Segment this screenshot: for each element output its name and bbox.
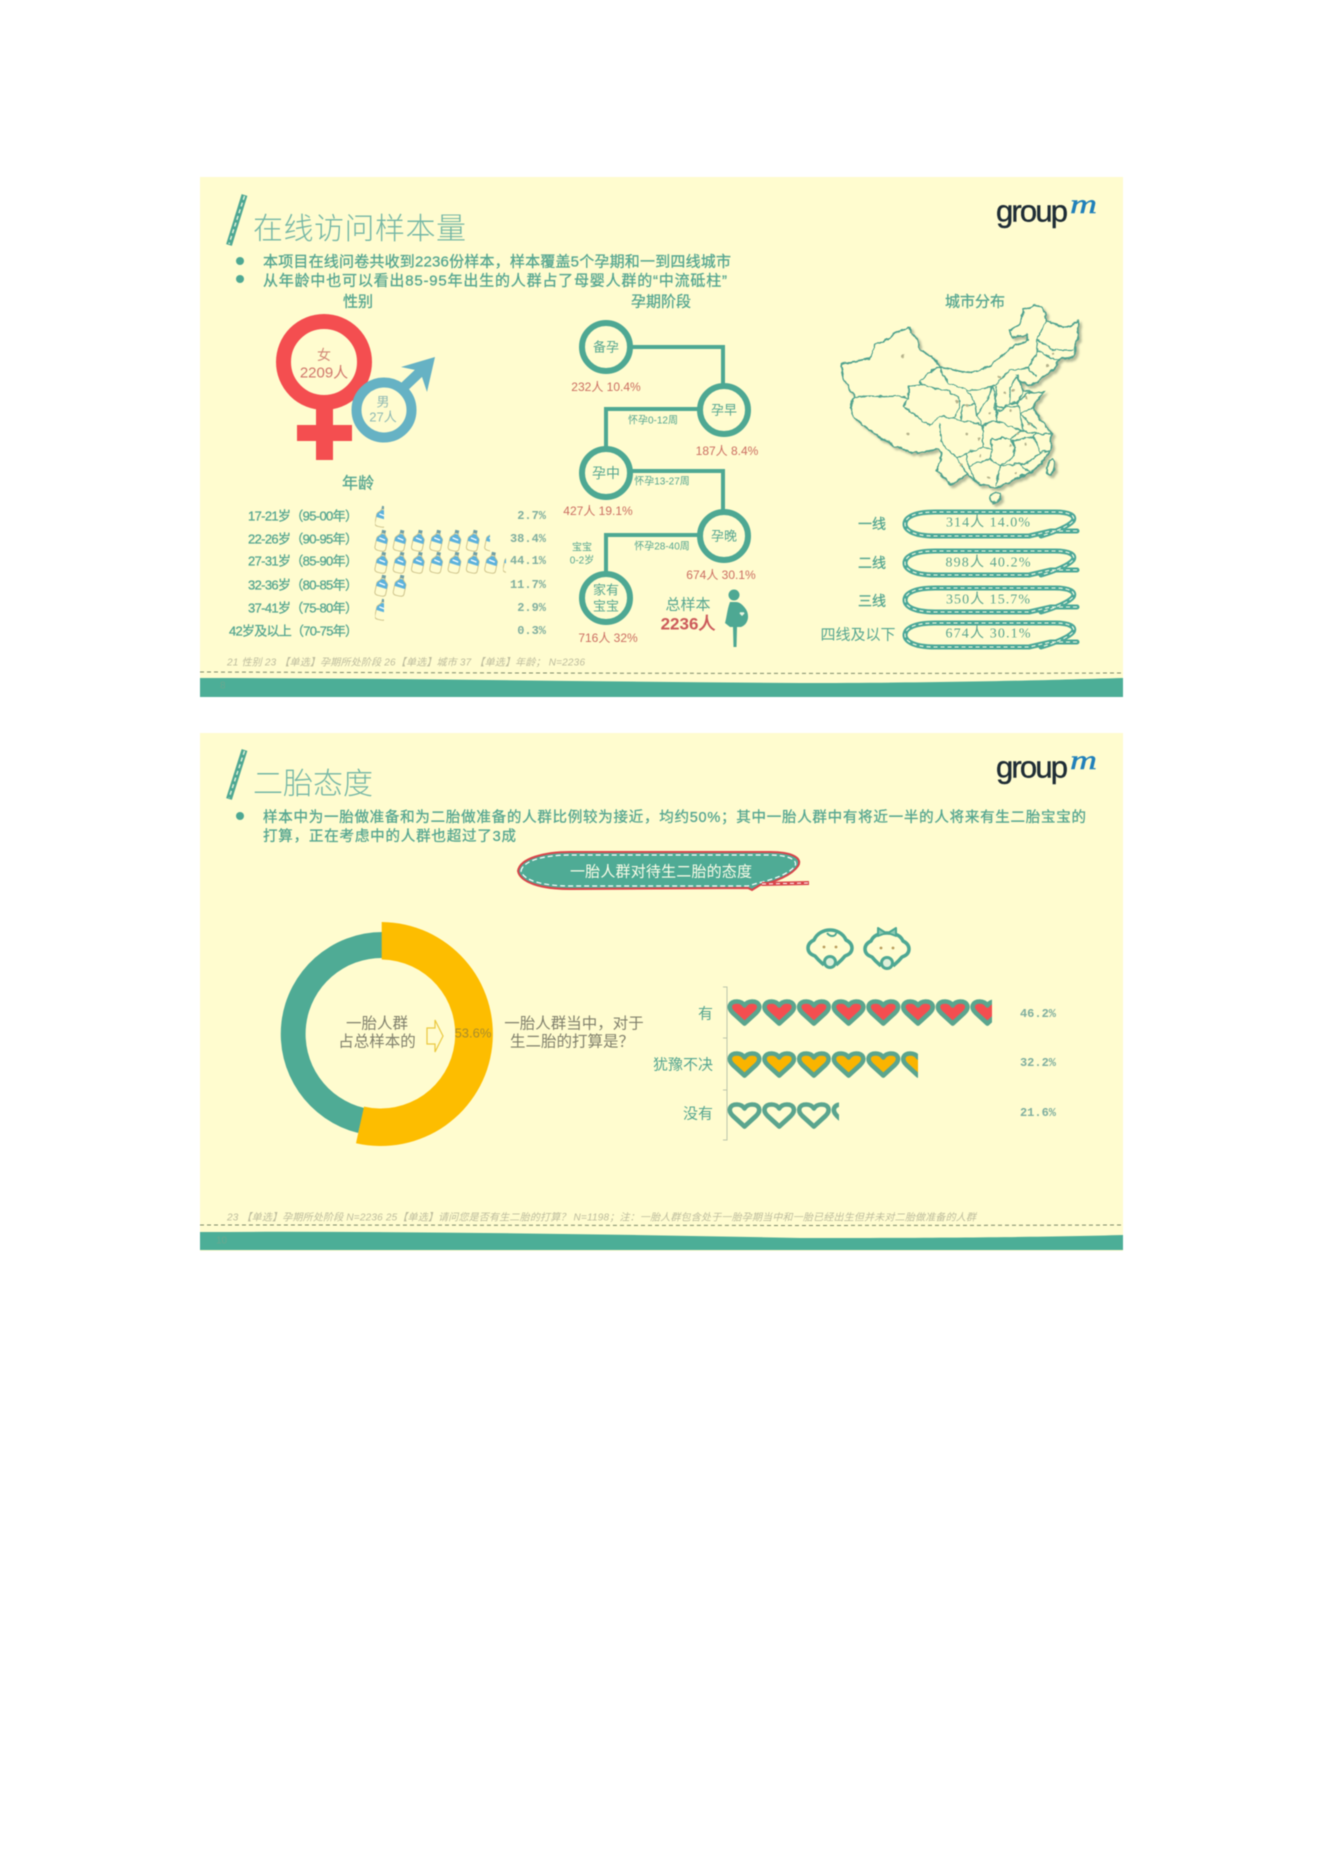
row 17-21: 2.7% bbox=[517, 509, 547, 523]
title icon: stitched slash bbox=[229, 195, 244, 245]
heading: city distribution: 城市分布 bbox=[945, 294, 1005, 310]
bullet point: 样本中为一胎做准备和为二胎做准备的人群比例较为接近，均约50%；其中一胎人群中有将近一半的人将来有生二胎宝宝的 bbox=[263, 808, 1086, 826]
row 27-31: 44.1% bbox=[510, 554, 547, 568]
stage duration labels: 怀孕13-27周 bbox=[634, 476, 690, 488]
row: no: 没有 bbox=[683, 1106, 713, 1122]
stage: 孕晚: 674人 30.1% bbox=[686, 568, 756, 582]
footer strip bbox=[200, 672, 1123, 697]
row 22-26: 38.4% bbox=[510, 532, 547, 546]
footer strip: 10 bbox=[216, 1236, 228, 1246]
tier 4: 四线及以下 bbox=[820, 626, 896, 644]
footer strip: 8 bbox=[220, 680, 226, 692]
tier 2 bbox=[858, 551, 1077, 575]
donut centre text: 占总样本的 bbox=[338, 1032, 416, 1050]
row: yes bbox=[698, 1002, 1057, 1024]
stage: 孕中 bbox=[563, 449, 633, 518]
heading: age: 年龄 bbox=[342, 474, 374, 492]
total sample callout bbox=[661, 596, 716, 634]
bullet points bbox=[236, 254, 731, 290]
stage: 孕中: 孕中 bbox=[592, 465, 620, 481]
panel: online sample size bbox=[200, 177, 1123, 697]
row: undecided bbox=[653, 1054, 1057, 1076]
chart: heart pictogram bbox=[653, 987, 1057, 1140]
logo: groupm: m bbox=[1070, 189, 1097, 219]
stage duration labels: 宝宝 bbox=[572, 540, 592, 554]
bullet points: 本项目在线问卷共收到2236份样本，样本覆盖5个孕期和一到四线城市 bbox=[263, 254, 731, 270]
icon: pregnant woman bbox=[725, 590, 748, 647]
stage: 孕晚 bbox=[686, 512, 756, 582]
row 32-36 bbox=[248, 574, 547, 597]
stage duration labels: 怀孕0-12周 bbox=[628, 414, 678, 426]
row: no bbox=[683, 1104, 1057, 1126]
heading: pregnancy stage: 孕期阶段 bbox=[631, 294, 691, 310]
title icon: stitched slash bbox=[229, 750, 244, 799]
row 42+ bbox=[229, 624, 547, 638]
stage duration labels bbox=[570, 414, 690, 566]
chart: city tiers bbox=[820, 512, 1077, 647]
row 42+: 42岁及以上（70-75年） bbox=[229, 624, 358, 638]
bullet point: 打算，正在考虑中的人群也超过了3成 bbox=[263, 828, 516, 845]
question text bbox=[504, 1014, 644, 1050]
tier 1: 314人 14.0% bbox=[946, 514, 1030, 530]
title: 二胎态度 bbox=[253, 759, 373, 803]
row 32-36: 11.7% bbox=[510, 578, 547, 592]
row 17-21: 17-21岁（95-00年） bbox=[248, 508, 358, 524]
icon: female symbol with count: 女 bbox=[317, 347, 331, 363]
tier 2: 898人 40.2% bbox=[946, 554, 1031, 570]
tier 3 bbox=[858, 588, 1077, 612]
icon: female symbol with count: 2209人 bbox=[300, 364, 348, 382]
icon: male symbol with count: 27人 bbox=[369, 410, 397, 424]
title: 在线访问样本量 bbox=[253, 204, 466, 248]
row: undecided: 犹豫不决 bbox=[653, 1056, 713, 1074]
icon: baby girl bbox=[865, 928, 909, 968]
stage: 备孕: 备孕 bbox=[593, 340, 619, 354]
row 27-31: 27-31岁（85-90年） bbox=[248, 554, 358, 568]
logo: groupm: group bbox=[996, 750, 1068, 784]
question text: 生二胎的打算是？ bbox=[510, 1032, 634, 1050]
row: yes: 46.2% bbox=[1020, 1007, 1057, 1021]
tier 4 bbox=[820, 623, 1077, 647]
icon: baby boy bbox=[808, 930, 852, 968]
tier 1 bbox=[858, 512, 1077, 536]
stage: 家有宝宝: 家有 bbox=[593, 582, 619, 598]
stage: 孕早: 孕早 bbox=[711, 402, 737, 418]
question text: 一胎人群当中，对于 bbox=[504, 1014, 644, 1032]
stage: 孕晚: 孕晚 bbox=[711, 528, 737, 544]
bullet point bbox=[236, 808, 1086, 845]
total sample callout: 2236人 bbox=[661, 614, 716, 634]
row 22-26: 22-26岁（90-95年） bbox=[248, 532, 358, 546]
logo: groupm: group bbox=[996, 194, 1068, 228]
stage: 孕早 bbox=[696, 386, 759, 458]
row 37-41 bbox=[248, 598, 547, 621]
bullet points: 从年龄中也可以看出85-95年出生的人群占了母婴人群的“中流砥柱” bbox=[263, 272, 727, 290]
heading: gender: 性别 bbox=[343, 294, 373, 310]
stage duration labels: 怀孕28-40周 bbox=[634, 540, 690, 552]
stage: 备孕 bbox=[571, 323, 641, 394]
arrow: hollow yellow bbox=[427, 1020, 443, 1052]
tier 3: 三线 bbox=[858, 593, 886, 609]
logo: groupm: m bbox=[1070, 745, 1097, 775]
tier 2: 二线 bbox=[858, 555, 886, 571]
stage: 家有宝宝: 716人 32% bbox=[578, 631, 638, 645]
chart: age pictogram bbox=[229, 505, 547, 638]
footnote: 21 性别 23 【单选】孕期所处阶段 26【单选】城市 37 【单选】年龄； N=2236 bbox=[226, 656, 585, 668]
logo: groupm bbox=[996, 189, 1097, 228]
logo: groupm bbox=[996, 745, 1097, 784]
stage: 孕早: 187人 8.4% bbox=[696, 444, 759, 458]
panel: attitude to a second child bbox=[200, 733, 1123, 1251]
row 37-41: 2.9% bbox=[517, 601, 547, 615]
icon: male symbol with count: 男 bbox=[376, 394, 390, 410]
chart: donut 53.6% bbox=[281, 922, 493, 1146]
row: yes: 有 bbox=[698, 1006, 713, 1022]
tier 1: 一线 bbox=[858, 516, 886, 532]
donut value: 53.6% bbox=[455, 1026, 492, 1040]
stage: 孕中: 427人 19.1% bbox=[563, 504, 633, 518]
row 32-36: 32-36岁（80-85年） bbox=[248, 578, 358, 592]
row: no: 21.6% bbox=[1020, 1106, 1057, 1120]
icon: male symbol with count bbox=[356, 357, 435, 438]
icon: female symbol with count bbox=[284, 322, 364, 460]
badge: first-child group attitude: 一胎人群对待生二胎的态度 bbox=[570, 864, 752, 880]
stage duration labels: 0-2岁 bbox=[570, 554, 594, 566]
footer strip bbox=[200, 1225, 1123, 1250]
footnote: 23 【单选】孕期所处阶段 N=2236 25【单选】请问您是否有生二胎的打算？ N=1198；注：一胎人群包含处于一胎孕期当中和一胎已经出生但并未对二胎做准备的人群 bbox=[226, 1212, 978, 1224]
row 37-41: 37-41岁（75-80年） bbox=[248, 600, 358, 616]
row 27-31 bbox=[248, 551, 547, 574]
row 22-26 bbox=[248, 529, 547, 552]
stage: 家有宝宝: 宝宝 bbox=[593, 598, 619, 614]
tier 4: 674人 30.1% bbox=[946, 626, 1031, 642]
row: undecided: 32.2% bbox=[1020, 1056, 1057, 1070]
map: China provinces bbox=[841, 305, 1078, 503]
row 42+: 0.3% bbox=[517, 624, 547, 638]
donut centre text: 一胎人群 bbox=[346, 1014, 408, 1032]
stage: 备孕: 232人 10.4% bbox=[571, 380, 641, 394]
tier 3: 350人 15.7% bbox=[946, 592, 1030, 608]
total sample callout: 总样本 bbox=[665, 596, 711, 614]
stage: 家有宝宝 bbox=[578, 574, 638, 645]
row 17-21 bbox=[248, 505, 547, 528]
badge: first-child group attitude bbox=[518, 852, 809, 890]
flow: pregnancy stages bbox=[563, 323, 759, 645]
donut centre text bbox=[338, 1014, 416, 1050]
